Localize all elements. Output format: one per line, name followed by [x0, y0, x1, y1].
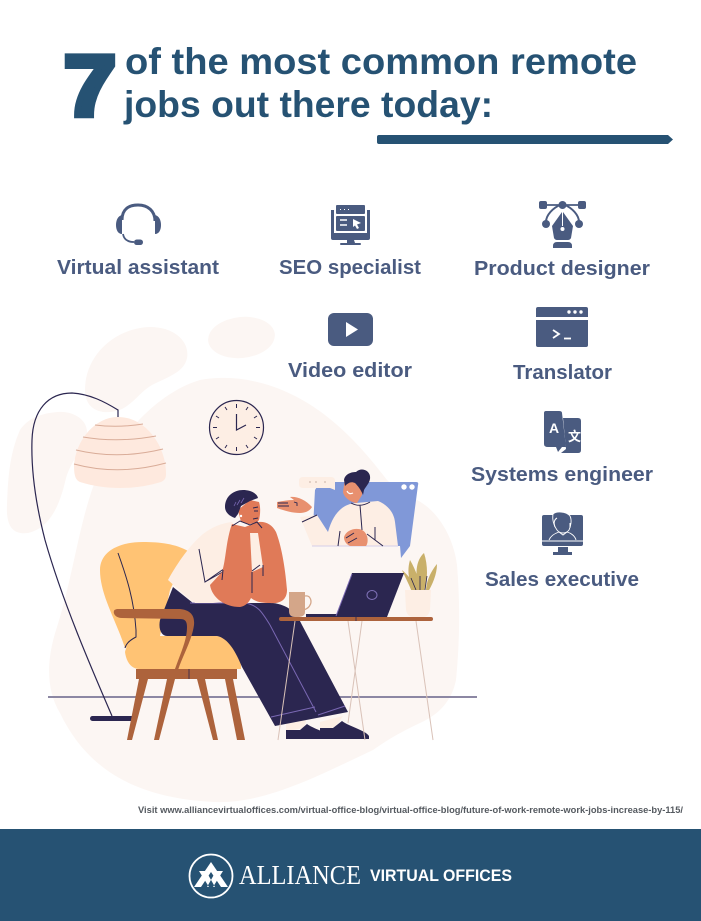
illustration: person seated — [159, 490, 369, 739]
plant leaves — [402, 553, 437, 592]
icon: translation cards — [544, 411, 581, 453]
icon: wall clock — [210, 400, 264, 454]
shirt gap between arms — [250, 533, 263, 572]
illustration background blobs — [7, 314, 459, 802]
upper left blob — [85, 327, 187, 412]
arms — [210, 522, 287, 607]
trousers — [159, 587, 348, 726]
job: virtual assistant — [57, 205, 219, 279]
plant pot — [405, 590, 431, 617]
job: sales executive — [485, 512, 639, 591]
title line 1: of the most common remote — [125, 41, 637, 82]
icon: translation cards: A — [549, 420, 559, 436]
illustration: video call screen — [277, 469, 418, 558]
lamp shade — [74, 417, 166, 488]
socks — [286, 716, 343, 731]
icon: terminal window — [536, 307, 588, 347]
illustration: armchair back and seat — [100, 542, 241, 669]
label: Virtual assistant — [57, 257, 219, 279]
face — [238, 500, 260, 524]
job: video editor — [288, 313, 412, 382]
logo wordmark ALLIANCE: ALLIANCE — [239, 860, 361, 890]
logo wordmark VIRTUAL OFFICES: VIRTUAL OFFICES — [370, 866, 512, 885]
man gesturing hand — [277, 497, 312, 513]
lamp pole — [32, 393, 118, 716]
icon: monitor with browser — [331, 205, 370, 245]
icon: floor lamp — [32, 393, 166, 721]
label: Sales executive — [485, 569, 639, 591]
job: SEO specialist — [279, 205, 421, 279]
label: SEO specialist — [279, 257, 421, 279]
title line 2: jobs out there today: — [123, 84, 493, 125]
man collar and shirt lines — [302, 502, 383, 546]
label: Video editor — [288, 360, 412, 382]
screen buttons — [401, 484, 407, 490]
label: Systems engineer — [471, 464, 653, 486]
illustration: chair arm and frame — [114, 609, 245, 740]
table legs — [278, 621, 433, 740]
shirt — [168, 522, 262, 603]
man face — [343, 478, 363, 503]
icon: pen tool — [539, 201, 586, 248]
label: Product designer — [474, 258, 650, 280]
trouser seams — [190, 603, 345, 717]
job: systems engineer — [471, 411, 653, 486]
oval blob — [206, 314, 277, 361]
label: Translator — [513, 362, 612, 384]
title underline arrow — [377, 135, 673, 144]
cup — [289, 592, 305, 617]
title — [64, 39, 673, 144]
man hair — [344, 469, 370, 495]
illustration: table with laptop, cup and plant — [278, 553, 437, 740]
man body — [300, 501, 398, 546]
title numeral 7: 7 — [64, 39, 116, 134]
job: translator — [513, 307, 612, 384]
laptop — [336, 573, 404, 617]
screen panel — [312, 482, 418, 558]
lamp shade stripes — [74, 424, 166, 470]
table top — [279, 617, 433, 621]
left blob — [7, 412, 87, 533]
icon: video play — [328, 313, 373, 346]
lamp base — [90, 716, 134, 721]
source link: Visit www.alliancevirtualoffices.com/virtual-office-blog/virtual-office-blog/future-of-work-remote-work-jobs-increase-by-115/ — [138, 805, 683, 815]
logo mark — [190, 854, 232, 898]
speech bubble — [299, 477, 335, 490]
shoes — [286, 721, 369, 739]
icon: translation cards: 文 — [568, 429, 581, 444]
main blob — [49, 378, 459, 802]
man hand on chest — [344, 529, 368, 546]
icon: headset — [116, 205, 161, 245]
icon: monitor with agent — [542, 512, 583, 555]
job: product designer — [474, 201, 650, 280]
hair — [225, 490, 258, 518]
footer band — [0, 829, 701, 921]
floor line — [48, 696, 477, 698]
